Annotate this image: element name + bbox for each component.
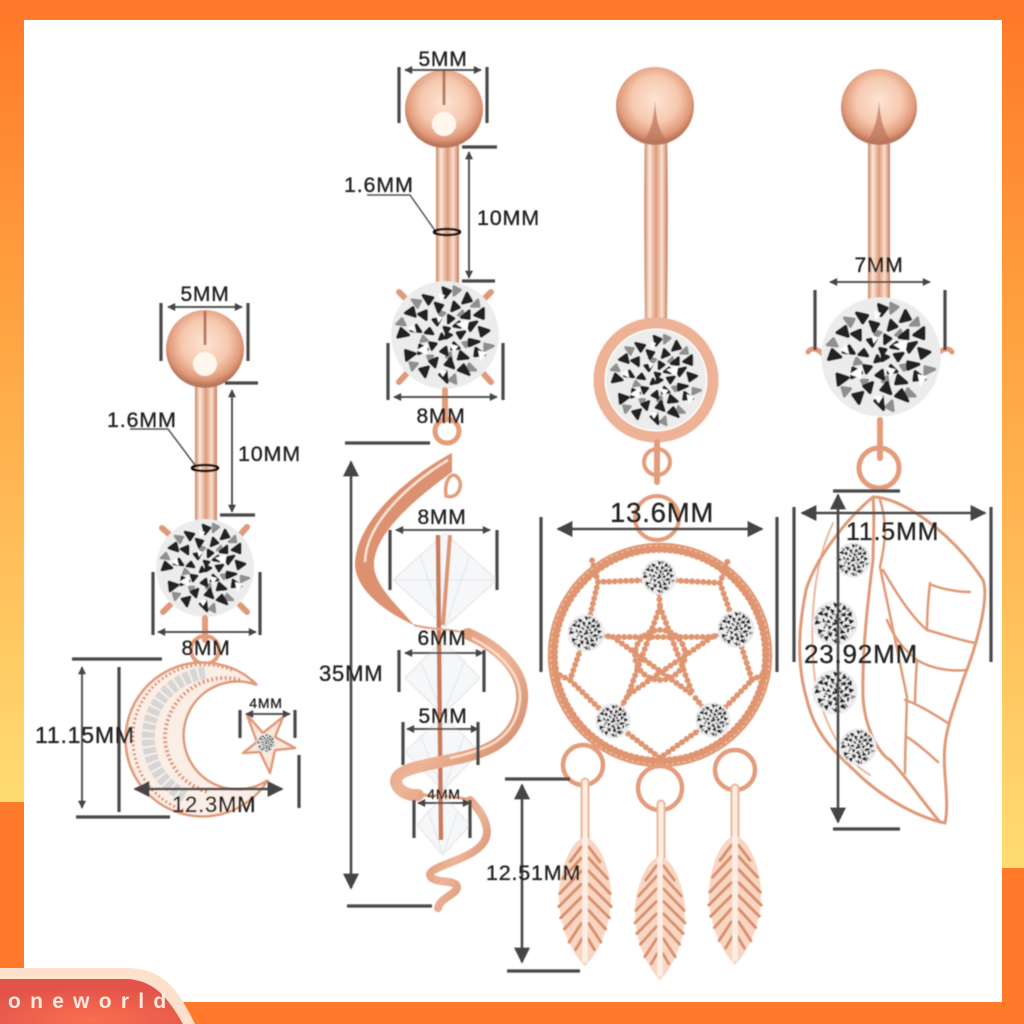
icon: spiral ribbon (355, 453, 522, 908)
icon: feathers (559, 836, 761, 980)
label: 12.51MM: 12.51MM (486, 861, 581, 885)
label: 8MM: 8MM (416, 405, 466, 428)
icon: beaded dream catcher (549, 544, 771, 766)
label: 1.6MM: 1.6MM (344, 173, 414, 197)
dimension marks: piece 4 (794, 254, 991, 829)
badge: oneworld store logo (0, 968, 195, 1024)
dimension marks: piece 3 (486, 497, 777, 971)
label: 4MM: 4MM (427, 786, 461, 802)
label: 1.6MM: 1.6MM (107, 408, 177, 432)
label: 4MM: 4MM (249, 695, 283, 711)
label: 11.15MM: 11.15MM (35, 722, 135, 748)
dimension marks: piece 1 (35, 283, 301, 817)
label: 10MM: 10MM (238, 442, 301, 466)
label: 23.92MM: 23.92MM (804, 639, 918, 669)
icon: star (243, 715, 295, 773)
icon: hollow leaf (800, 497, 985, 823)
label: 8MM: 8MM (417, 506, 467, 529)
label: 5MM: 5MM (180, 283, 230, 306)
label: 10MM: 10MM (477, 206, 540, 230)
label: 6MM: 6MM (417, 627, 467, 650)
piece 2: spiral belly ring with crystals (355, 70, 522, 908)
label: 35MM: 35MM (319, 661, 383, 686)
badge: oneworld store logo: oneworld (8, 990, 167, 1013)
dimension marks: piece 2 (319, 48, 540, 906)
piece 4: leaf belly ring (800, 69, 985, 823)
label: 12.3MM: 12.3MM (172, 792, 256, 817)
label: 8MM: 8MM (181, 637, 231, 660)
label: 13.6MM: 13.6MM (610, 497, 714, 528)
piece 3: dreamcatcher belly ring (549, 67, 771, 980)
piece 1: moon and star belly ring (126, 310, 295, 816)
label: 5MM: 5MM (418, 705, 468, 728)
icon: crescent moon (126, 662, 268, 816)
label: 11.5MM: 11.5MM (846, 518, 939, 546)
label: 7MM: 7MM (854, 254, 904, 277)
icon: crystal beads (393, 533, 497, 855)
label: 5MM: 5MM (418, 48, 468, 71)
